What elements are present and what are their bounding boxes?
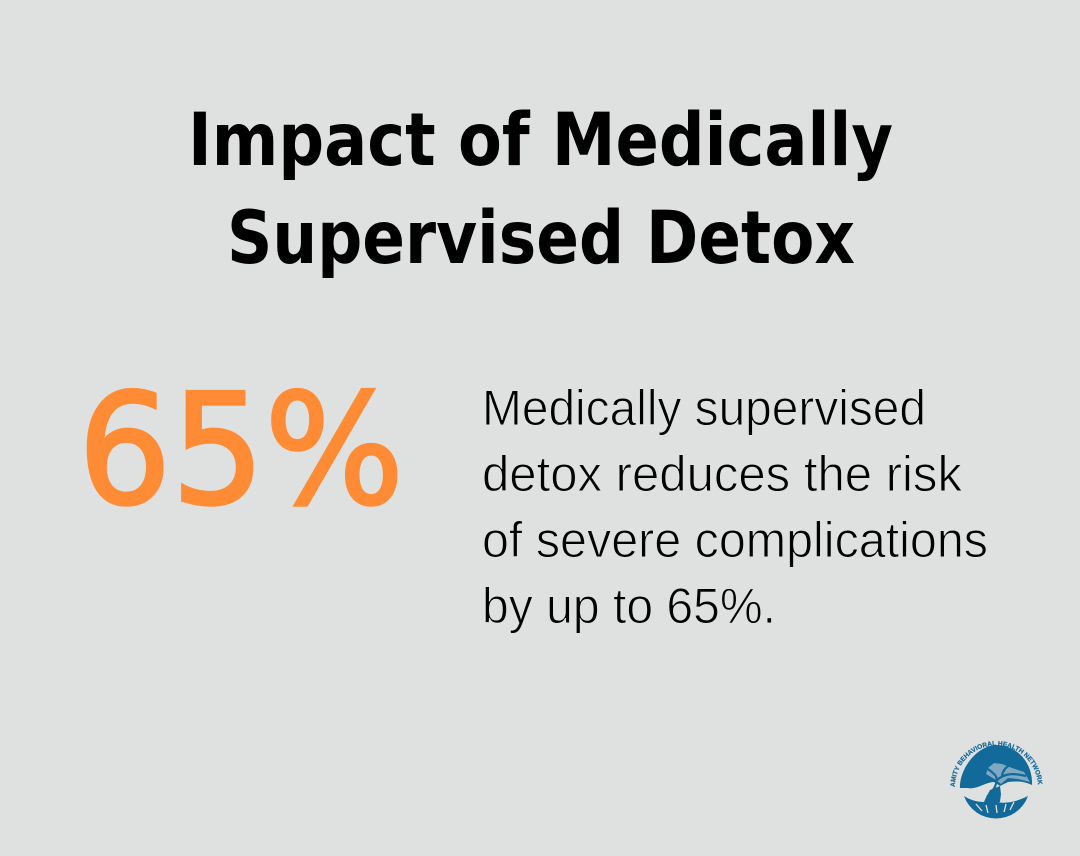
description text: detox reduces the risk <box>482 446 963 502</box>
description text <box>482 380 988 634</box>
logo: Amity Behavioral Health Network <box>950 740 1043 818</box>
title: Supervised Detox <box>227 196 855 281</box>
description text: by up to 65%. <box>482 578 776 634</box>
logo tree branches <box>982 765 1026 797</box>
description text: of severe complications <box>482 512 988 568</box>
logo canopy highlights <box>986 763 1030 784</box>
logo root gaps <box>976 802 1014 813</box>
big stat: 65%: 65% <box>78 362 404 540</box>
logo tree trunk <box>984 786 1001 802</box>
description text: Medically supervised <box>482 380 926 436</box>
logo ring text: AMITY BEHAVIORAL HEALTH NETWORK <box>950 740 1043 787</box>
title: Impact of Medically <box>188 98 893 183</box>
logo roots <box>964 796 1028 819</box>
logo tree canopy <box>960 745 1032 788</box>
title <box>188 98 893 281</box>
